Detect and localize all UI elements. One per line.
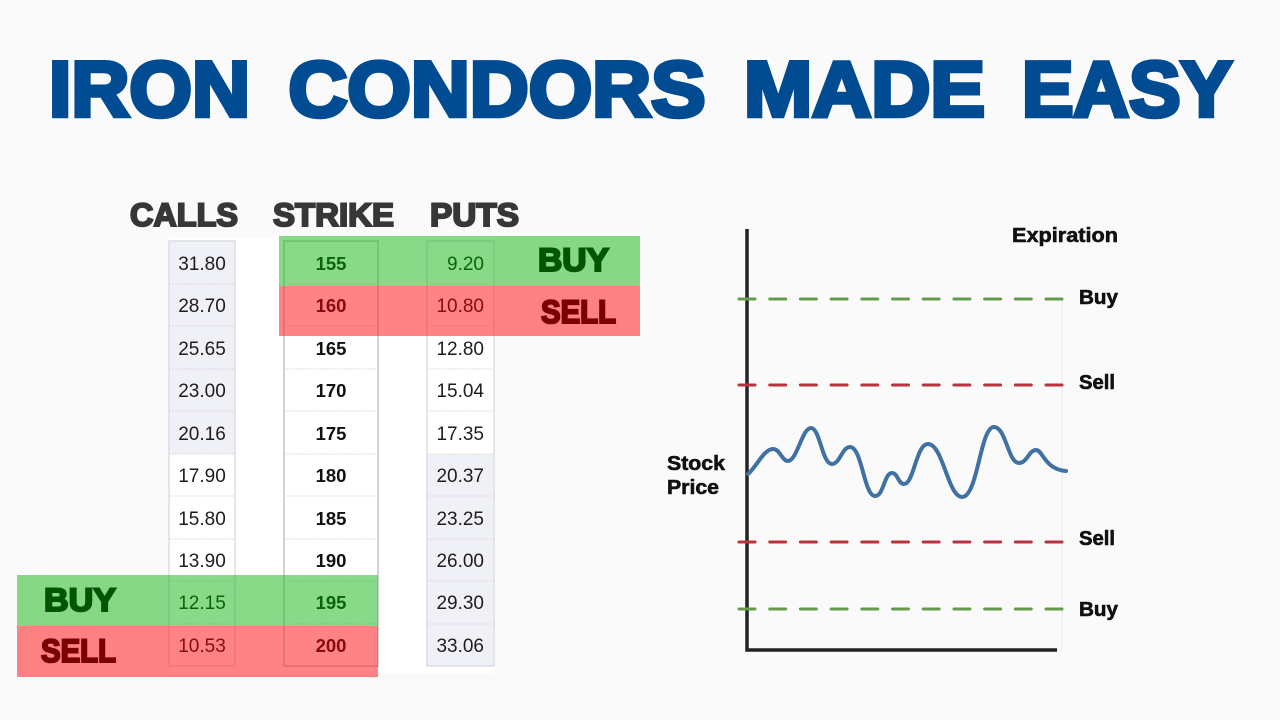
sell highlight: top: 160 — [316, 295, 346, 316]
buy highlight: top: 9.20 — [447, 254, 484, 275]
upper sell line — [739, 384, 1062, 386]
buy highlight: bottom: 195 — [316, 592, 346, 613]
calls column: 17.90 — [178, 466, 226, 487]
buy highlight: bottom — [17, 575, 378, 626]
chart labels: Buy — [1079, 599, 1119, 621]
calls column: 23.00 — [178, 381, 226, 402]
lower sell line — [739, 540, 1062, 544]
chart labels: Expiration — [1012, 225, 1118, 247]
sell highlight: bottom — [17, 626, 378, 677]
strike column: 165 — [316, 338, 346, 359]
chart labels — [667, 225, 1119, 621]
title: EASY — [1022, 45, 1232, 133]
axes — [747, 229, 1057, 650]
sell highlight: top: SELL — [541, 294, 616, 330]
calls column: 28.70 — [178, 296, 226, 317]
buy highlight: top: BUY — [538, 242, 609, 278]
column headings: PUTS — [430, 197, 519, 233]
puts column: 15.04 — [436, 381, 484, 402]
strike column: 180 — [316, 465, 346, 486]
sell highlight: bottom: SELL — [41, 633, 116, 669]
strike column: 175 — [316, 423, 346, 444]
title: MADE — [744, 45, 985, 133]
puts column: 17.35 — [436, 424, 484, 445]
calls column: 31.80 — [178, 254, 226, 275]
puts column: 12.80 — [436, 339, 484, 360]
puts column: 29.30 — [436, 593, 484, 614]
buy highlight: bottom: 12.15 — [178, 593, 226, 614]
payoff chart — [667, 225, 1119, 650]
strike column: 185 — [316, 508, 346, 529]
title: IRON — [49, 45, 250, 133]
chart labels: Stock — [667, 453, 726, 475]
chart labels: Sell — [1079, 372, 1115, 394]
puts column: 33.06 — [436, 636, 484, 657]
strike column: 190 — [316, 550, 346, 571]
calls column — [169, 241, 235, 666]
strike column: 170 — [316, 380, 346, 401]
options chain table — [169, 237, 495, 673]
calls column: 15.80 — [178, 509, 226, 530]
buy highlight: bottom: BUY — [44, 582, 116, 618]
puts column: 26.00 — [436, 551, 484, 572]
sell highlight: bottom: 200 — [316, 635, 346, 656]
sell highlight: top: 10.80 — [436, 296, 484, 317]
lower buy line — [739, 608, 1062, 610]
puts column: 20.37 — [436, 466, 484, 487]
calls column: 20.16 — [178, 424, 226, 445]
sell highlight: top — [279, 286, 640, 336]
column headings — [130, 197, 519, 233]
chart labels: Price — [667, 477, 719, 499]
upper buy line — [739, 298, 1062, 300]
calls column: 13.90 — [178, 551, 226, 572]
title — [49, 45, 1232, 133]
puts column: 23.25 — [436, 509, 484, 530]
puts column — [427, 241, 494, 666]
column headings: STRIKE — [273, 197, 394, 233]
chart labels: Buy — [1079, 287, 1119, 309]
title: CONDORS — [288, 45, 706, 133]
calls column: 25.65 — [178, 339, 226, 360]
expiration line — [1061, 300, 1063, 650]
buy highlight: top — [279, 236, 640, 286]
strike column — [284, 241, 378, 666]
sell highlight: bottom: 10.53 — [178, 636, 226, 657]
stock price line — [748, 427, 1066, 497]
buy highlight: top: 155 — [316, 253, 346, 274]
column headings: CALLS — [130, 197, 238, 233]
chart labels: Sell — [1079, 528, 1115, 550]
